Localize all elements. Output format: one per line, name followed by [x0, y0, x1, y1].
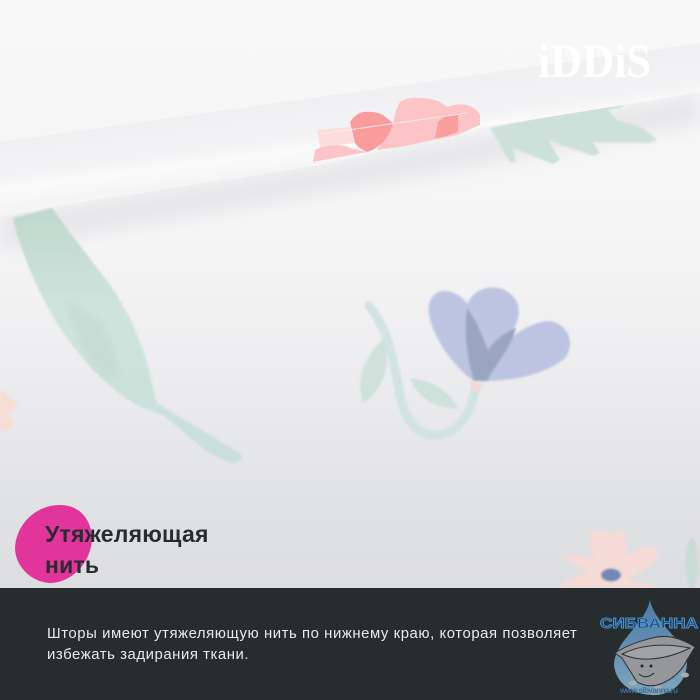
fabric print: blue flower with stem	[360, 287, 570, 435]
fabric print: green fern leaf	[490, 100, 657, 164]
petals	[429, 287, 570, 381]
fabric print: small pink flower at left edge	[0, 390, 17, 430]
IDDIS logo: iDDiS	[538, 35, 651, 88]
red flower printed on the hem	[313, 98, 480, 162]
dark description band	[0, 588, 700, 700]
bathtub	[615, 636, 695, 690]
description text: избежать задирания ткани.	[47, 647, 249, 663]
fabric print: large green leaf	[13, 208, 242, 463]
heading: нить	[45, 552, 99, 578]
brand name: СИБВАННА	[600, 615, 698, 632]
heading: Утяжеляющая	[45, 521, 209, 547]
folded hem band	[0, 43, 700, 216]
description text	[47, 626, 577, 663]
feet	[629, 680, 637, 686]
heading	[45, 521, 209, 578]
tub face	[640, 664, 644, 668]
fabric print: pink flower at bottom right	[558, 531, 660, 588]
site address: www.sibvanna.ru	[619, 686, 678, 695]
shadow under the hem	[0, 92, 700, 250]
fabric print: green bud at right edge	[686, 538, 698, 588]
description text: Шторы имеют утяжеляющую нить по нижнему краю, которая позволяет	[47, 626, 577, 642]
stem and leaves	[360, 306, 483, 435]
water drop	[614, 600, 687, 695]
